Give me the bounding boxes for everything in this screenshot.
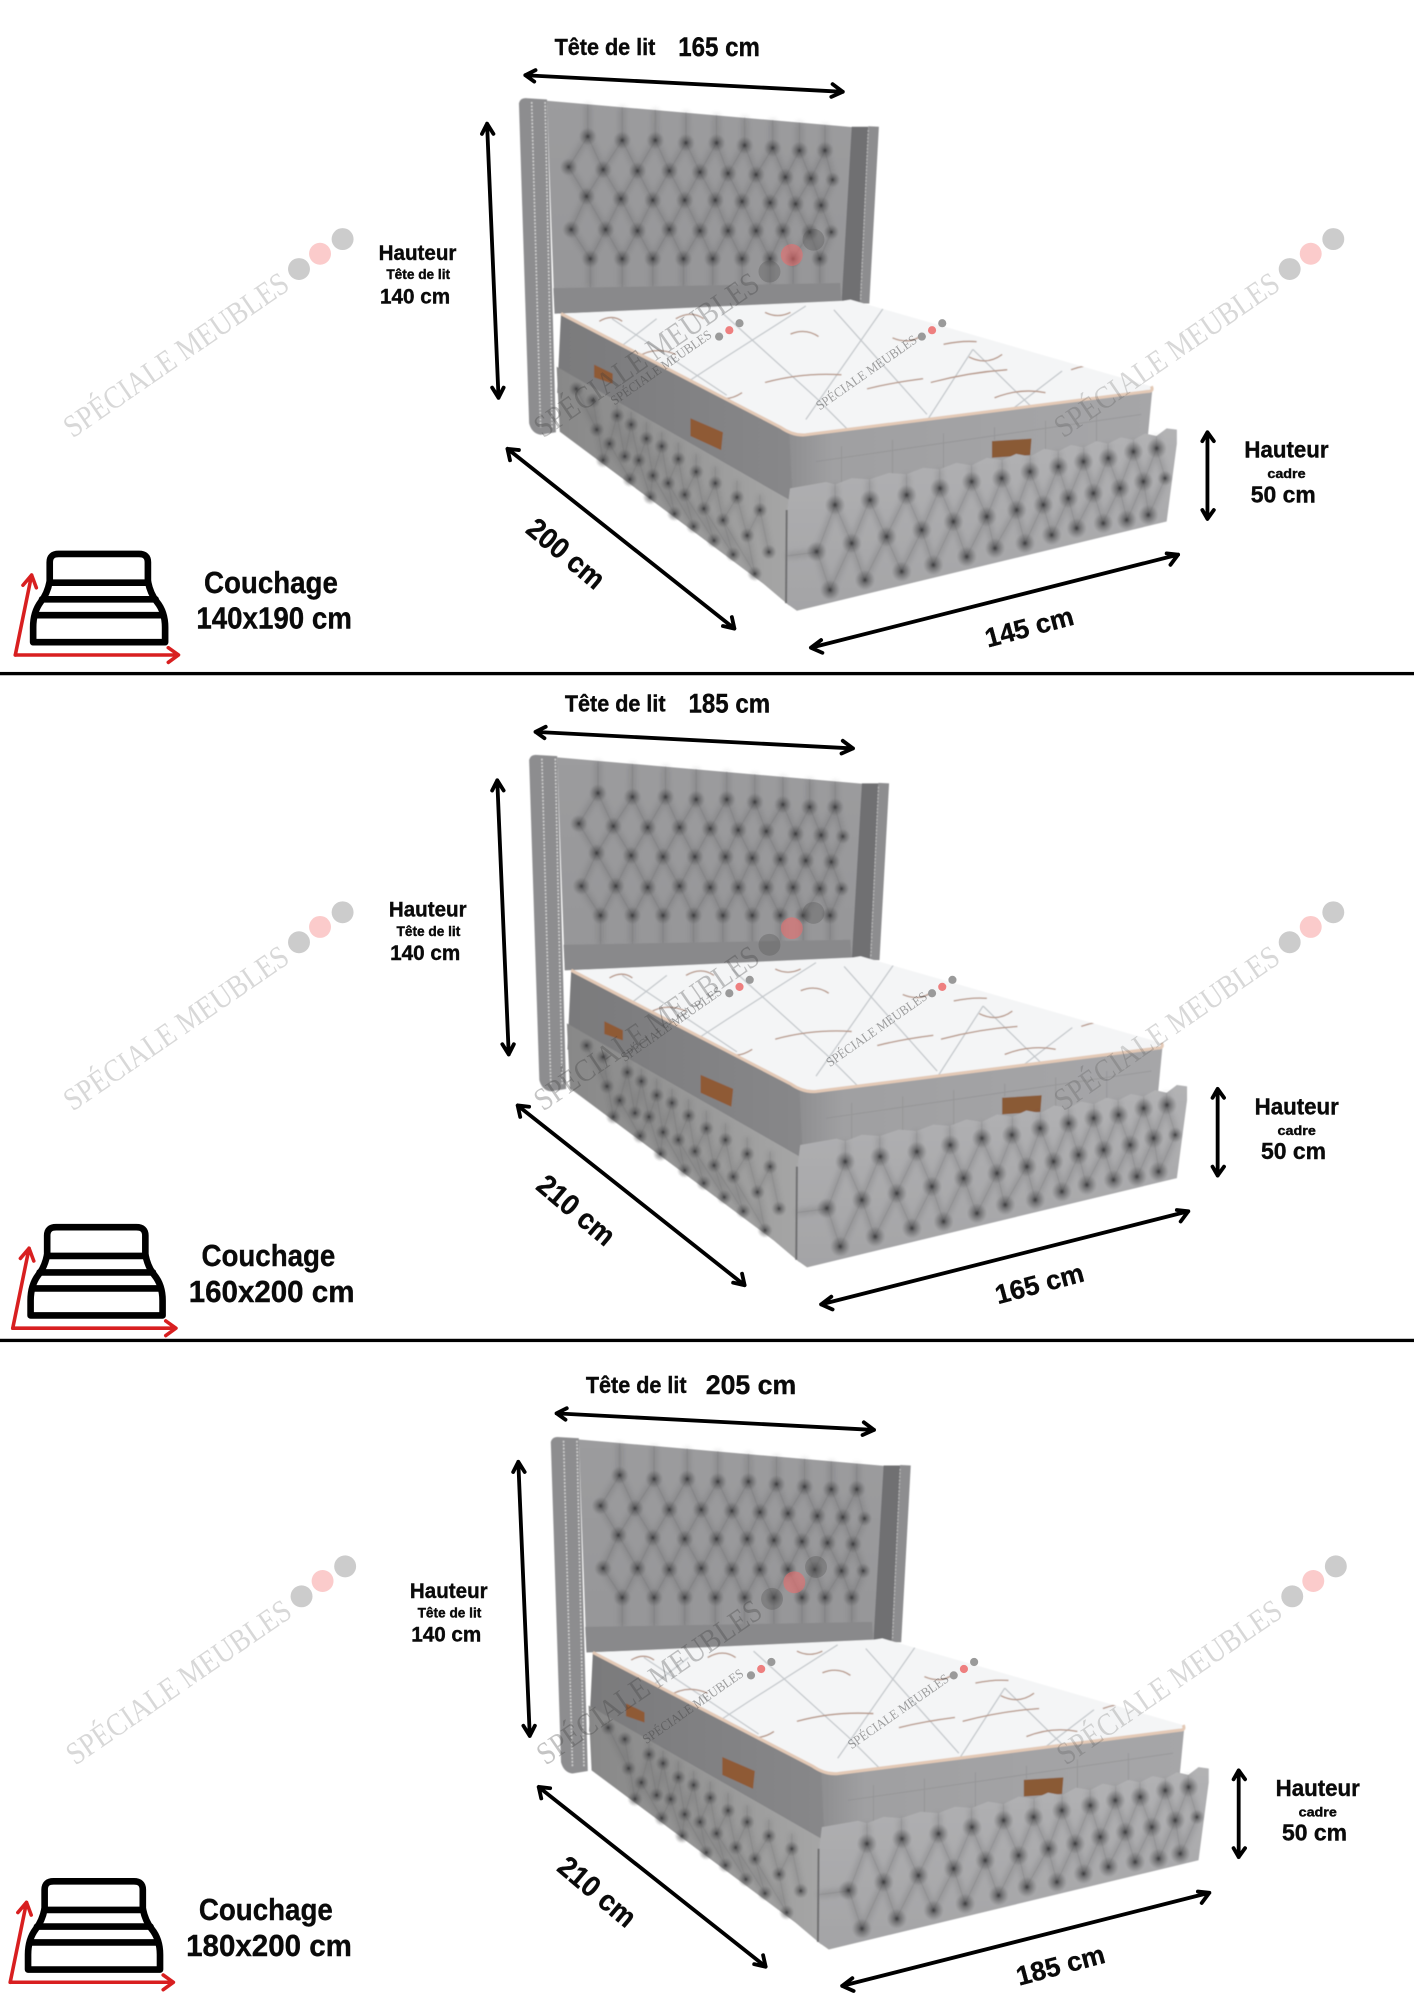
small watermarks on mattress: SPÉCIALE MEUBLES <box>608 327 714 408</box>
frame height dimension: Hauteur <box>1276 1775 1360 1801</box>
watermark left: SPÉCIALE MEUBLES <box>57 265 295 444</box>
frame height dimension: cadre <box>1267 466 1306 481</box>
length dimension: 210 cm <box>551 1850 643 1934</box>
frame height dimension <box>1234 1770 1360 1857</box>
headboard width dimension: Tête de lit <box>586 1372 687 1398</box>
small watermarks on mattress <box>618 976 957 1070</box>
frame height dimension: Hauteur <box>1255 1093 1339 1119</box>
small watermarks on mattress: SPÉCIALE MEUBLES <box>618 984 725 1065</box>
headboard height dimension <box>410 1462 535 1736</box>
headboard height dimension: Hauteur <box>379 240 457 265</box>
headboard height dimension: Tête de lit <box>386 267 451 282</box>
sleeping size label: Couchage <box>201 1239 335 1273</box>
headboard height dimension: Tête de lit <box>397 924 461 939</box>
sleeping size label <box>186 1893 352 1963</box>
frame height dimension <box>1213 1089 1339 1176</box>
frame height dimension: Hauteur <box>1244 437 1329 463</box>
headboard width dimension <box>536 689 853 754</box>
panel: 180x200 bed <box>10 1370 1360 1992</box>
frame height dimension <box>1202 432 1329 519</box>
frame height dimension: 50 cm <box>1261 1138 1326 1164</box>
bed photo <box>529 755 1187 1267</box>
frame height dimension: 50 cm <box>1282 1819 1347 1845</box>
watermark left: SPÉCIALE MEUBLES <box>57 939 295 1118</box>
dimensions <box>410 1370 1360 1992</box>
width dimension: 185 cm <box>1013 1939 1108 1992</box>
small watermarks on mattress: SPÉCIALE MEUBLES <box>640 1666 746 1747</box>
width dimension <box>821 1210 1188 1310</box>
sleeping size label <box>189 1239 354 1309</box>
sleeping size label: 140x190 cm <box>196 602 352 636</box>
icon: bed size <box>13 1227 176 1336</box>
watermark right: SPÉCIALE MEUBLES <box>1048 939 1286 1118</box>
headboard height dimension <box>379 124 504 398</box>
headboard width dimension <box>525 32 843 97</box>
length dimension: 210 cm <box>530 1168 622 1253</box>
icon: bed size <box>15 554 179 662</box>
length dimension <box>518 1105 745 1285</box>
length dimension <box>507 449 734 629</box>
headboard height dimension: 140 cm <box>411 1622 481 1647</box>
watermark right: SPÉCIALE MEUBLES <box>1050 1593 1288 1772</box>
headboard width dimension: 185 cm <box>689 689 770 719</box>
icon: bed size <box>10 1881 173 1990</box>
headboard width dimension <box>557 1370 874 1435</box>
small watermarks on mattress: SPÉCIALE MEUBLES <box>823 989 930 1070</box>
watermark left: SPÉCIALE MEUBLES <box>59 1593 298 1772</box>
frame height dimension: cadre <box>1278 1123 1316 1138</box>
headboard height dimension: 140 cm <box>390 940 460 965</box>
headboard height dimension <box>389 780 514 1054</box>
width dimension: 165 cm <box>992 1258 1087 1310</box>
watermark over bed: SPÉCIALE MEUBLES <box>527 265 766 444</box>
dimensions <box>389 689 1339 1310</box>
sleeping size label: Couchage <box>204 566 338 600</box>
small watermarks on mattress: SPÉCIALE MEUBLES <box>813 332 920 413</box>
watermark over bed: SPÉCIALE MEUBLES <box>530 1593 768 1772</box>
headboard width dimension: Tête de lit <box>555 34 656 60</box>
headboard height dimension: Hauteur <box>410 1578 488 1603</box>
sleeping size label: 160x200 cm <box>189 1275 354 1309</box>
length dimension: 200 cm <box>520 512 611 596</box>
frame height dimension: 50 cm <box>1251 481 1316 507</box>
small watermarks on mattress: SPÉCIALE MEUBLES <box>845 1671 952 1752</box>
sleeping size label: Couchage <box>199 1893 333 1927</box>
small watermarks on mattress <box>608 319 946 413</box>
headboard width dimension: 205 cm <box>706 1370 796 1400</box>
watermark over bed: SPÉCIALE MEUBLES <box>527 939 766 1118</box>
bed photo <box>551 1437 1209 1950</box>
panel: 140x190 bed <box>15 32 1344 662</box>
width dimension <box>842 1891 1209 1992</box>
small watermarks on mattress <box>640 1658 978 1752</box>
bed photo <box>519 98 1177 611</box>
width dimension: 145 cm <box>982 601 1077 653</box>
headboard height dimension: Hauteur <box>389 897 467 922</box>
headboard width dimension: 165 cm <box>678 32 760 62</box>
headboard height dimension: Tête de lit <box>418 1605 482 1620</box>
panel: 160x200 bed <box>13 689 1344 1336</box>
headboard width dimension: Tête de lit <box>565 690 666 716</box>
watermark right: SPÉCIALE MEUBLES <box>1048 265 1286 444</box>
width dimension <box>811 553 1178 653</box>
length dimension <box>539 1787 766 1967</box>
sleeping size label <box>196 566 352 636</box>
frame height dimension: cadre <box>1299 1804 1337 1819</box>
headboard height dimension: 140 cm <box>380 283 450 308</box>
sleeping size label: 180x200 cm <box>186 1929 352 1963</box>
